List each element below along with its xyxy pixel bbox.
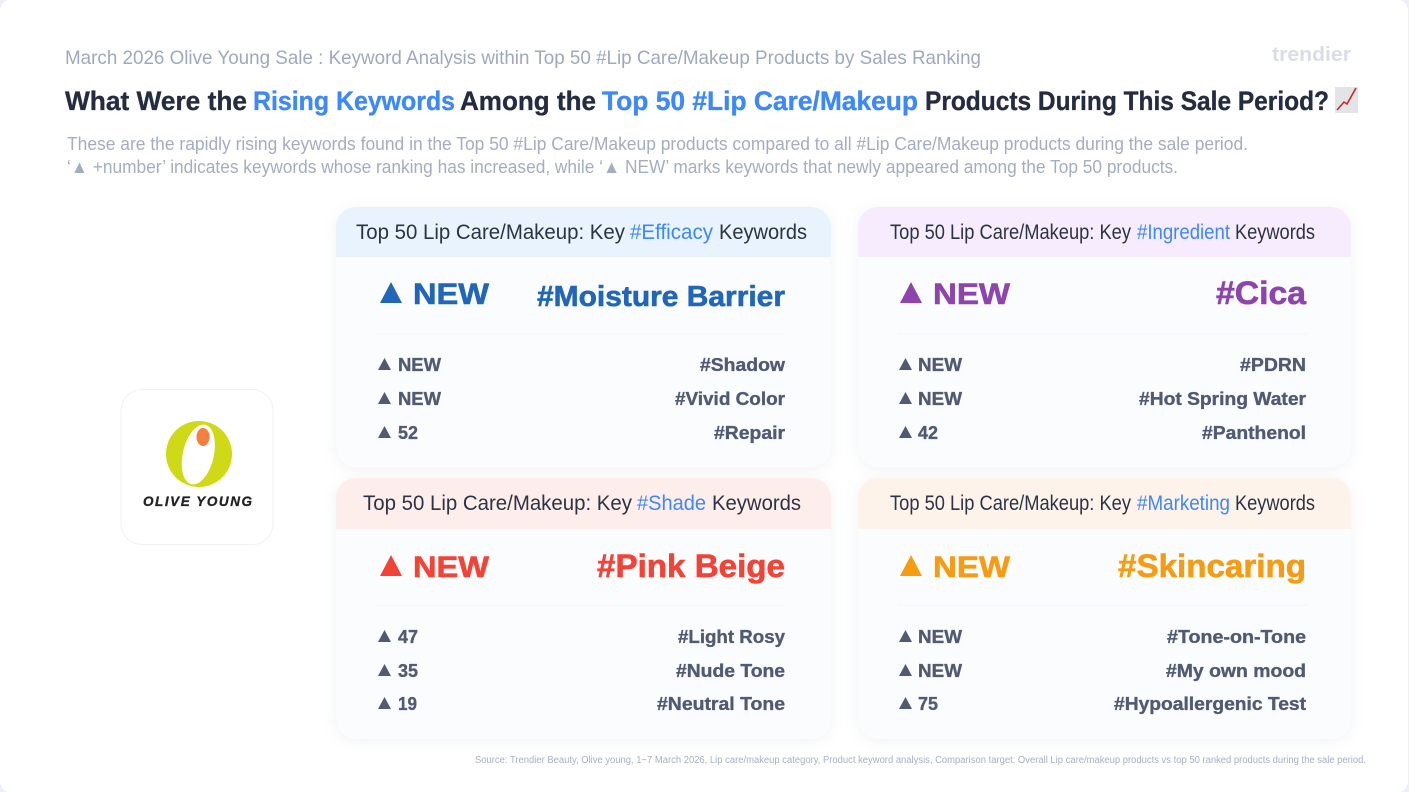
panel header: shade: Keywords <box>712 492 801 515</box>
top keyword: Cica: NEW <box>933 278 1011 311</box>
ranked keywords: shade: #Neutral Tone <box>657 694 785 714</box>
panel header: efficacy: Top 50 Lip Care/Makeup: Key <box>356 221 625 244</box>
brand wordmark: trendier: trendier <box>1272 44 1351 66</box>
main title: Top 50 #Lip Care/Makeup <box>602 86 918 116</box>
description text: These are the rapidly rising keywords found in the Top 50 #Lip Care/Makeup products compared to all #Lip Care/Makeup products during the sale period. <box>67 134 1248 154</box>
ranked keywords: shade: 47 <box>398 627 418 647</box>
ranked keywords: ingredient: #PDRN <box>1240 355 1306 375</box>
panel header: shade <box>336 478 831 529</box>
logo: Olive Young: OLIVE YOUNG <box>143 494 252 509</box>
top keyword: Moisture Barrier: NEW <box>413 278 490 311</box>
description text <box>67 134 1248 177</box>
top keyword: Cica: #Cica <box>1216 275 1306 311</box>
ranked keywords: marketing: #My own mood <box>1166 661 1306 681</box>
top keyword: Pink Beige: NEW <box>413 551 490 584</box>
ranked keywords: marketing: #Hypoallergenic Test <box>1114 694 1306 714</box>
ranked keywords: efficacy: 52 <box>398 423 418 443</box>
panel header: marketing: Keywords <box>1235 492 1315 515</box>
ranked keywords: efficacy: #Repair <box>714 423 785 443</box>
top keyword: Skincaring: NEW <box>933 551 1011 584</box>
panel header: marketing: Top 50 Lip Care/Makeup: Key <box>890 492 1131 515</box>
description text: ‘▲ +number’ indicates keywords whose ranking has increased, while ‘▲ NEW’ marks keywords that newly appeared among the Top 50 products. <box>67 157 1178 177</box>
panel header: ingredient: Keywords <box>1235 221 1315 244</box>
panel header: shade: Top 50 Lip Care/Makeup: Key <box>363 492 632 515</box>
main title: Rising Keywords <box>253 86 455 116</box>
ranked keywords: shade <box>378 627 785 714</box>
ranked keywords: shade: #Nude Tone <box>676 661 785 681</box>
top keyword: Pink Beige: #Pink Beige <box>597 548 785 584</box>
ranked keywords: ingredient: #Panthenol <box>1202 423 1306 443</box>
main title: Among the <box>460 86 596 116</box>
main title: Products During This Sale Period? <box>925 86 1329 116</box>
ranked keywords: efficacy: #Vivid Color <box>675 389 785 409</box>
top keyword: Skincaring <box>900 548 1306 584</box>
report subtitle: March 2026 Olive Young Sale : Keyword Analysis within Top 50 #Lip Care/Makeup Products by Sales Ranking <box>65 47 981 69</box>
ranked keywords: marketing <box>899 627 1306 714</box>
ranked keywords: marketing: NEW <box>918 627 962 647</box>
ranked keywords: shade: 19 <box>398 694 417 714</box>
panel: efficacy keywords <box>336 207 831 467</box>
ranked keywords: marketing: 75 <box>918 694 938 714</box>
panel: shade keywords <box>336 478 831 739</box>
panel header: shade: #Shade <box>637 492 706 515</box>
ranked keywords: shade: #Light Rosy <box>678 627 785 647</box>
ranked keywords: ingredient <box>899 355 1306 443</box>
panel header: marketing: #Marketing <box>1137 492 1230 515</box>
panel header: ingredient: Top 50 Lip Care/Makeup: Key <box>890 221 1131 244</box>
panel header: ingredient: #Ingredient <box>1137 221 1230 244</box>
main title: What Were the <box>65 86 247 116</box>
top keyword: Cica <box>900 275 1306 311</box>
panel header: efficacy <box>336 207 831 257</box>
top keyword: Moisture Barrier: #Moisture Barrier <box>537 281 785 313</box>
main title <box>65 86 1329 116</box>
panel: marketing keywords <box>858 478 1351 739</box>
top keyword: Pink Beige <box>380 548 785 584</box>
panel: ingredient keywords <box>858 207 1351 467</box>
panel header: efficacy: Keywords <box>719 221 807 244</box>
source footnote: Source: Trendier Beauty, Olive young, 1~7 March 2026, Lip care/makeup category, Product keyword analysis, Comparison target: Overall Lip care/makeup products vs top 50 ranked products during the sale period. <box>475 755 1366 766</box>
ranked keywords: ingredient: #Hot Spring Water <box>1139 389 1306 409</box>
ranked keywords: ingredient: NEW <box>918 389 962 409</box>
ranked keywords: efficacy: NEW <box>398 355 441 375</box>
logo: Olive Young <box>121 390 273 544</box>
top keyword: Skincaring: #Skincaring <box>1118 548 1306 584</box>
panel header: marketing <box>858 478 1351 529</box>
ranked keywords: ingredient: NEW <box>918 355 962 375</box>
ranked keywords: ingredient: 42 <box>918 423 938 443</box>
icon: rising chart emoji <box>1335 87 1358 113</box>
ranked keywords: shade: 35 <box>398 661 418 681</box>
ranked keywords: marketing: #Tone-on-Tone <box>1167 627 1306 647</box>
ranked keywords: efficacy: NEW <box>398 389 441 409</box>
ranked keywords: marketing: NEW <box>918 661 962 681</box>
ranked keywords: efficacy <box>378 355 786 443</box>
panel header: ingredient <box>858 207 1351 257</box>
ranked keywords: efficacy: #Shadow <box>700 355 786 375</box>
panel header: efficacy: #Efficacy <box>630 221 713 244</box>
top keyword: Moisture Barrier <box>380 278 785 313</box>
